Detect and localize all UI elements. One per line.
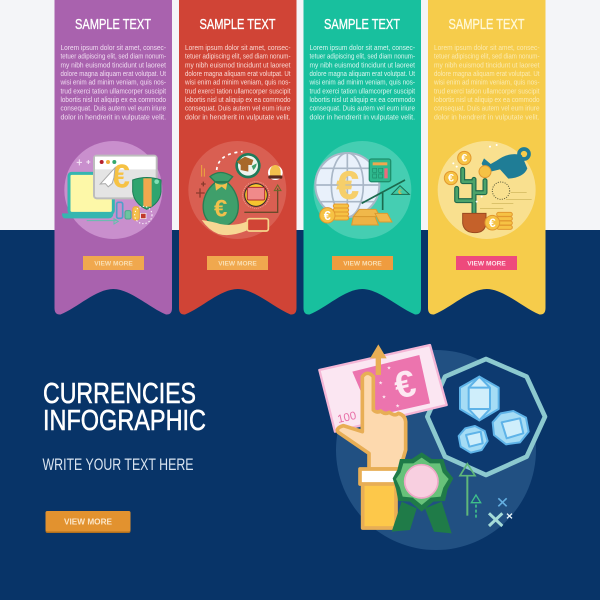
button: purple panel	[83, 256, 144, 270]
sleeve	[360, 469, 400, 528]
button: red panel: VIEW MORE	[218, 260, 257, 268]
text block: red panel: consequat. Duis autem vel eum iriure	[185, 106, 291, 113]
banknote: ★	[387, 366, 392, 372]
text block: red panel: Lorem ipsum dolor sit amet, consec-	[185, 45, 291, 52]
text block: red panel: dolore magna aliquam erat volutpat. Ut	[185, 71, 291, 78]
text block: yellow panel	[433, 45, 540, 121]
text block: teal panel: trud exerci tation ullamcorper suscipit	[310, 88, 415, 95]
icon: laptop and euro window: €	[111, 159, 130, 196]
banknote: 100	[336, 410, 358, 426]
text block: yellow panel: wisi enim ad minim veniam, quis nos-	[433, 80, 540, 87]
panel: teal	[304, 0, 421, 315]
text block: yellow panel: my nibh euismod tincidunt ut laoreet	[434, 62, 540, 69]
icon: money bag in hand	[188, 141, 286, 239]
arrow up	[370, 344, 387, 375]
strategy arrows and marks	[460, 464, 512, 526]
button: teal panel	[332, 256, 393, 270]
text block: red panel: my nibh euismod tincidunt ut laoreet	[185, 62, 291, 69]
heading: purple panel: SAMPLE TEXT	[75, 16, 151, 33]
text block: yellow panel: Lorem ipsum dolor sit amet, consec-	[434, 45, 540, 52]
title: INFOGRAPHIC	[43, 405, 206, 437]
text block: yellow panel: dolor in hendrerit in vulputate velit.	[434, 114, 540, 121]
banknote: ★	[382, 394, 387, 400]
button: red panel	[207, 256, 268, 270]
icon: globe, gold and scale: €	[398, 189, 402, 196]
gems	[459, 377, 529, 453]
icon: laptop and euro window	[62, 141, 162, 239]
banknote: ★	[378, 380, 383, 386]
text block: yellow panel: consequat. Duis autem vel eum iriure	[434, 106, 540, 113]
text block: yellow panel: lobortis nisl ut aliquip ex ea commodo	[434, 97, 540, 104]
title: CURRENCIES	[43, 378, 196, 410]
text block: purple panel: wisi enim ad minim veniam, quis nos-	[60, 80, 167, 87]
text block: yellow panel: dolore magna aliquam erat volutpat. Ut	[434, 71, 540, 78]
button: yellow panel	[456, 256, 517, 270]
text block: purple panel: dolore magna aliquam erat volutpat. Ut	[60, 71, 166, 78]
text block: purple panel: trud exerci tation ullamcorper suscipit	[60, 88, 166, 95]
text block: purple panel: my nibh euismod tincidunt ut laoreet	[60, 62, 166, 69]
icon: money bag in hand: €	[214, 196, 227, 223]
text block: teal panel: tetuer adipiscing elit, sed diam nonum-	[310, 54, 416, 61]
button: main view more	[46, 511, 130, 533]
banknote: ★	[395, 404, 400, 410]
hand	[337, 373, 406, 469]
text block: teal panel: my nibh euismod tincidunt ut laoreet	[310, 62, 415, 69]
text block: teal panel: wisi enim ad minim veniam, quis nos-	[309, 80, 416, 87]
button: yellow panel: VIEW MORE	[467, 260, 506, 268]
text block: yellow panel: trud exerci tation ullamcorper suscipit	[434, 88, 540, 95]
heading: red panel: SAMPLE TEXT	[200, 16, 276, 33]
icon: watering can and cactus: €	[461, 153, 467, 165]
icon: watering can and cactus: €	[448, 173, 454, 185]
text block: teal panel	[309, 45, 416, 121]
text block: teal panel: dolor in hendrerit in vulputate velit.	[310, 114, 415, 121]
text block: red panel: lobortis nisl ut aliquip ex ea commodo	[185, 97, 291, 104]
backdrop circle	[336, 350, 536, 550]
title	[43, 378, 206, 437]
panel: red	[179, 0, 296, 315]
icon: watering can and cactus: €	[489, 216, 496, 230]
text block: yellow panel: tetuer adipiscing elit, sed diam nonum-	[434, 54, 540, 61]
heading: teal panel: SAMPLE TEXT	[324, 16, 400, 33]
button: purple panel: VIEW MORE	[94, 260, 133, 268]
icon: watering can and cactus	[438, 141, 536, 239]
text block: red panel	[184, 45, 291, 121]
text block: purple panel: dolor in hendrerit in vulputate velit.	[60, 114, 166, 121]
text block: purple panel: Lorem ipsum dolor sit amet, consec-	[60, 45, 167, 52]
text block: purple panel: tetuer adipiscing elit, sed diam nonum-	[60, 54, 167, 61]
subtitle: WRITE YOUR TEXT HERE	[42, 456, 194, 474]
rosette	[392, 452, 453, 533]
text block: red panel: dolor in hendrerit in vulputate velit.	[185, 114, 291, 121]
text block: purple panel: lobortis nisl ut aliquip ex ea commodo	[60, 97, 166, 104]
button: main view more: VIEW MORE	[64, 516, 112, 526]
octagon frame	[427, 359, 545, 475]
text block: red panel: tetuer adipiscing elit, sed diam nonum-	[185, 54, 291, 61]
banknote: €	[390, 361, 420, 407]
banknote	[319, 345, 447, 432]
heading: yellow panel: SAMPLE TEXT	[448, 16, 524, 33]
icon: hand, banknote, gems and rosette	[319, 344, 545, 550]
text block: teal panel: dolore magna aliquam erat volutpat. Ut	[310, 71, 415, 78]
button: teal panel: VIEW MORE	[343, 260, 382, 268]
panel: purple	[54, 0, 172, 315]
icon: globe, gold and scale: €	[337, 164, 359, 208]
icon: globe, gold and scale	[313, 141, 411, 239]
panel: yellow	[428, 0, 546, 315]
text block: purple panel: consequat. Duis autem vel eum iriure	[60, 106, 166, 113]
text block: purple panel	[60, 45, 167, 121]
text block: teal panel: consequat. Duis autem vel eum iriure	[310, 106, 415, 113]
text block: teal panel: Lorem ipsum dolor sit amet, consec-	[310, 45, 416, 52]
icon: globe, gold and scale: €	[324, 209, 331, 223]
text block: red panel: trud exerci tation ullamcorper suscipit	[185, 88, 291, 95]
text block: teal panel: lobortis nisl ut aliquip ex ea commodo	[310, 97, 415, 104]
text block: red panel: wisi enim ad minim veniam, quis nos-	[184, 80, 291, 87]
